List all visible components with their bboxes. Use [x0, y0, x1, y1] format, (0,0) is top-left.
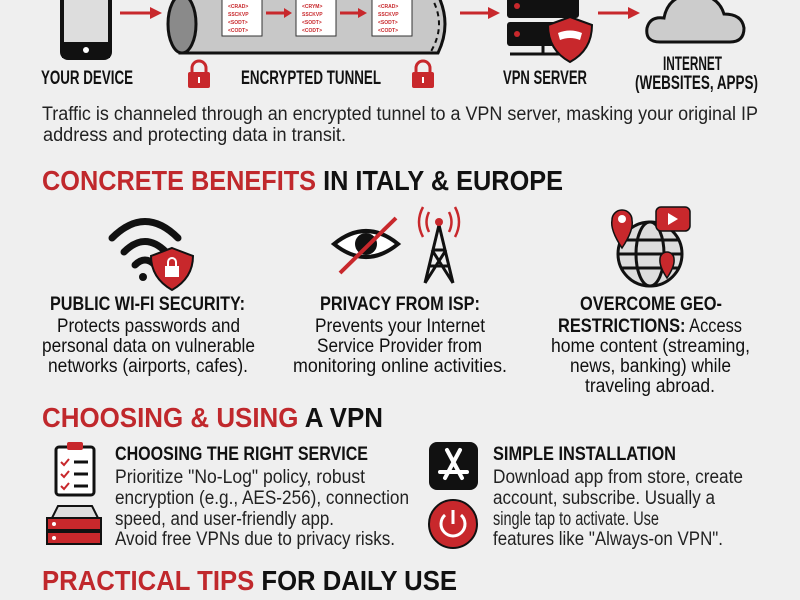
icon: eye and tower	[334, 207, 459, 283]
icon: encrypted tunnel: <CODT>	[302, 28, 322, 34]
icon: encrypted tunnel	[168, 0, 445, 53]
text: simple installation: Download app from store, create	[493, 467, 743, 488]
text: public wifi	[42, 294, 255, 377]
text: geo restrictions	[551, 294, 750, 397]
icon: phone	[62, 0, 110, 58]
text: public wifi: networks (airports, cafes).	[48, 356, 248, 377]
text: privacy isp	[293, 294, 507, 377]
icon: wifi shield	[112, 222, 193, 290]
text: privacy isp: monitoring online activities.	[293, 356, 507, 377]
text: description: Traffic is channeled through an encrypted tunnel to a VPN server, masking your original IP	[42, 104, 758, 125]
heading: benefits: CONCRETE BENEFITS IN ITALY & EUROPE	[42, 165, 563, 196]
icon: globe pins	[612, 207, 690, 286]
labels: flow: VPN SERVER	[503, 68, 587, 89]
text: choosing right service: CHOOSING THE RIGHT SERVICE	[115, 444, 368, 465]
text: privacy isp: Service Provider from	[317, 336, 482, 357]
icon: encrypted tunnel: <CRAD>	[378, 4, 398, 10]
text: geo restrictions: OVERCOME GEO-	[580, 294, 722, 315]
text: geo restrictions: news, banking) while	[570, 356, 731, 377]
icon: cloud	[647, 0, 744, 42]
text: choosing right service: Prioritize "No-Log" policy, robust	[115, 467, 366, 488]
text: choosing right service: encryption (e.g., AES-256), connection	[115, 488, 409, 509]
text: choosing right service: Avoid free VPNs due to privacy risks.	[115, 529, 395, 550]
icon: encrypted tunnel: <SODT>	[378, 20, 398, 26]
text: public wifi: personal data on vulnerable	[42, 336, 255, 357]
text: privacy isp: PRIVACY FROM ISP:	[320, 294, 480, 315]
labels: flow: INTERNET	[663, 54, 722, 75]
icon: encrypted tunnel: SSCKVP	[228, 12, 249, 18]
icon: encrypted tunnel: SSCKVP	[378, 12, 399, 18]
labels: flow: YOUR DEVICE	[41, 68, 133, 89]
text: geo restrictions: traveling abroad.	[585, 376, 715, 397]
icon: vpn server	[507, 0, 592, 62]
text: description	[42, 104, 758, 146]
arrow: server to internet	[598, 7, 640, 19]
icon: encrypted tunnel: <SODT>	[228, 20, 248, 26]
icon: clipboard	[56, 442, 94, 495]
heading: practical tips: PRACTICAL TIPS FOR DAILY USE	[42, 565, 457, 596]
text: choosing right service	[115, 444, 409, 550]
icon: encrypted tunnel: <CODT>	[378, 28, 398, 34]
labels: flow	[41, 54, 758, 94]
text: description: address and protecting data in transit.	[43, 125, 346, 146]
text: simple installation: account, subscribe. Usually a	[493, 488, 715, 509]
text: choosing right service: speed, and user-friendly app.	[115, 509, 334, 530]
text: simple installation	[493, 444, 743, 550]
icon: encrypted tunnel: <CRYM>	[302, 4, 322, 10]
text: simple installation: SIMPLE INSTALLATION	[493, 444, 676, 465]
text: public wifi: Protects passwords and	[57, 316, 240, 337]
text: simple installation: single tap to activate. Use	[493, 509, 659, 530]
icon: encrypted tunnel: <CRAD>	[228, 4, 248, 10]
text: geo restrictions: RESTRICTIONS: Access	[558, 316, 742, 337]
arrow: tunnel to server	[460, 7, 500, 19]
icon: encrypted tunnel: SSCKVP	[302, 12, 323, 18]
icon: server red	[47, 506, 101, 544]
text: public wifi: PUBLIC WI-FI SECURITY:	[50, 294, 245, 315]
text: geo restrictions: home content (streaming,	[551, 336, 750, 357]
icon: app store	[429, 442, 478, 490]
icon: encrypted tunnel: <CODT>	[228, 28, 248, 34]
labels: flow: ENCRYPTED TUNNEL	[241, 68, 381, 89]
text: privacy isp: Prevents your Internet	[315, 316, 486, 337]
icon: power	[429, 500, 477, 548]
arrow: device to tunnel	[120, 7, 162, 19]
heading: choosing: CHOOSING & USING A VPN	[42, 402, 383, 433]
icon: encrypted tunnel: <SODT>	[302, 20, 322, 26]
text: simple installation: features like "Always-on VPN".	[493, 529, 723, 550]
icon: lock right	[412, 61, 434, 88]
icon: lock left	[188, 61, 210, 88]
